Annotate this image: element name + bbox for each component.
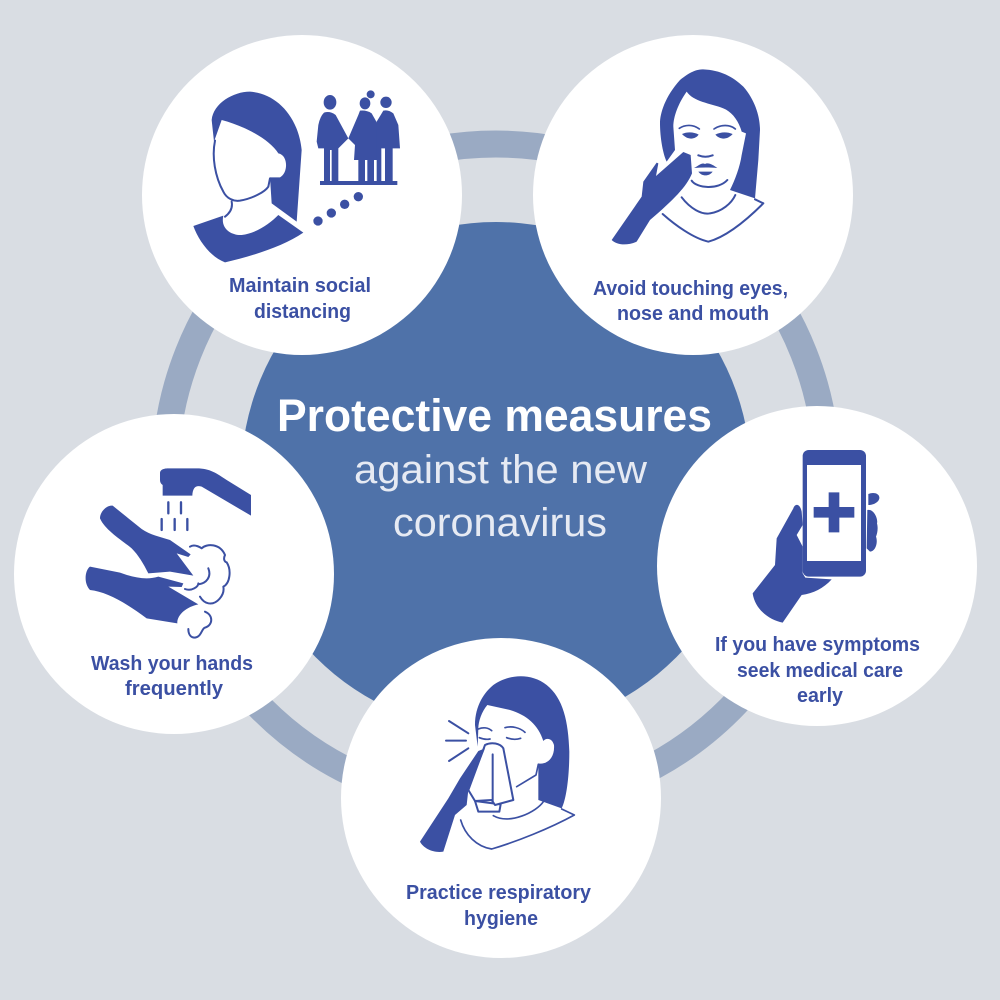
icon: woman and distant group: [193, 90, 400, 262]
label: Maintain social: [229, 275, 371, 297]
panel: respiratory hygiene: [341, 638, 661, 958]
icon: hand touching face: [612, 69, 763, 244]
label: Wash your hands: [91, 653, 253, 675]
title: [277, 390, 712, 545]
title: against the new: [354, 448, 647, 492]
panel: social distancing: [142, 35, 462, 355]
label: If you have symptoms: [715, 634, 920, 656]
icon: hand holding phone: [753, 450, 879, 623]
panel: seek medical care: [657, 406, 977, 726]
icon: person sneezing into tissue: [420, 676, 574, 852]
label: frequently: [125, 678, 224, 700]
label: [406, 882, 592, 930]
central circle: [241, 222, 751, 732]
label: seek medical care: [737, 660, 903, 682]
label: distancing: [254, 301, 351, 323]
label: nose and mouth: [617, 303, 769, 325]
outer ring: [165, 144, 827, 806]
panel: wash hands: [14, 414, 334, 734]
label: [91, 653, 253, 700]
icon: hands under tap: [86, 468, 251, 638]
title: coronavirus: [393, 501, 607, 545]
label: Practice respiratory: [406, 882, 592, 904]
label: early: [797, 685, 844, 707]
title: Protective measures: [277, 390, 712, 441]
label: [229, 275, 371, 323]
label: [593, 278, 788, 325]
label: [715, 634, 920, 707]
label: hygiene: [464, 908, 538, 930]
label: Avoid touching eyes,: [593, 278, 788, 300]
panel: avoid touching face: [533, 35, 853, 355]
